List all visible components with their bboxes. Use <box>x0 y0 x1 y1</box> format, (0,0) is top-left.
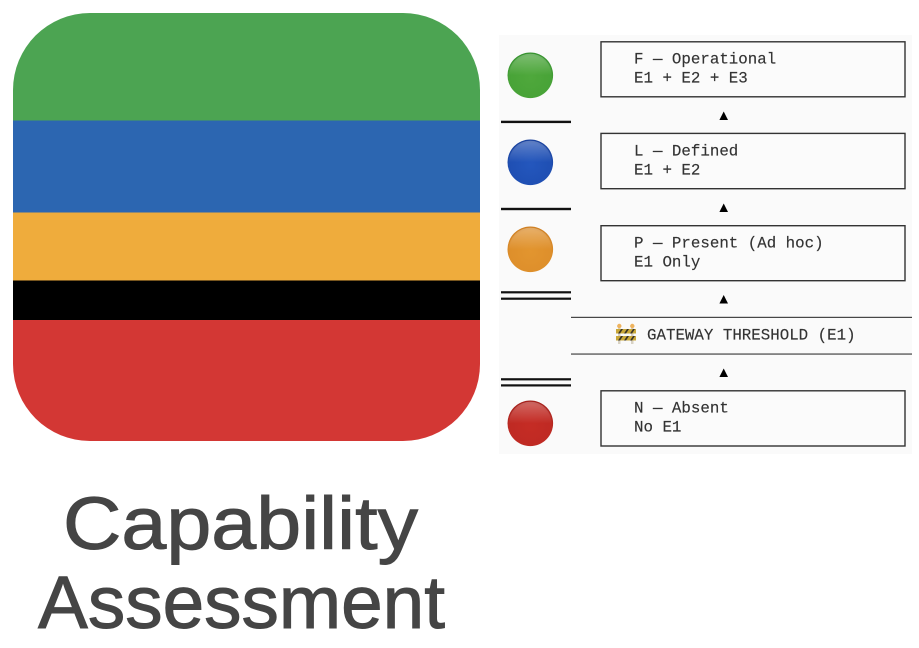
level F: operational <box>508 42 905 98</box>
title <box>38 482 445 644</box>
band: green <box>13 13 480 120</box>
level L: defined <box>508 133 905 189</box>
divider: double line <box>501 378 571 386</box>
band: orange <box>13 212 480 280</box>
divider: single line <box>501 121 571 123</box>
text: No E1: No E1 <box>634 418 681 436</box>
box: P present <box>601 226 905 281</box>
text: E1 only: E1 Only <box>634 254 700 272</box>
text: gateway threshold: GATEWAY THRESHOLD (E1) <box>647 326 856 344</box>
title line: Assessment: Assessment <box>38 561 445 644</box>
icon: blue status circle <box>508 140 553 185</box>
divider: double line <box>501 291 571 300</box>
text: P present: P — Present (Ad hoc) <box>634 234 824 252</box>
band: red <box>13 320 480 441</box>
text: F operational: F — Operational <box>634 50 776 68</box>
icon: construction barrier <box>616 324 636 344</box>
text: E1 + E2 + E3: E1 + E2 + E3 <box>634 70 748 88</box>
band: black <box>13 280 480 320</box>
box: N absent <box>601 391 905 446</box>
icon: green status circle <box>508 53 553 98</box>
panel background <box>499 35 912 454</box>
band: blue <box>13 120 480 212</box>
text: N absent: N — Absent <box>634 400 729 418</box>
arrow: gateway to P <box>719 295 728 304</box>
icon: red status circle <box>508 400 553 446</box>
icon: orange status circle <box>508 226 553 272</box>
gateway threshold band <box>571 317 912 355</box>
arrow: N to gateway <box>719 368 728 377</box>
arrow: P to L <box>719 204 728 212</box>
level P: present <box>508 226 905 281</box>
arrow: L to F <box>719 112 728 120</box>
text: E1 + E2: E1 + E2 <box>634 162 700 180</box>
divider: single line <box>501 208 571 210</box>
title line: Capability: Capability <box>63 482 418 565</box>
box: L defined <box>601 133 905 189</box>
box: F operational <box>601 42 905 97</box>
text: L defined: L — Defined <box>634 142 738 160</box>
icon: colour-banded rounded square <box>13 13 480 441</box>
level N: absent <box>508 391 905 446</box>
panel: maturity ladder <box>499 35 912 454</box>
